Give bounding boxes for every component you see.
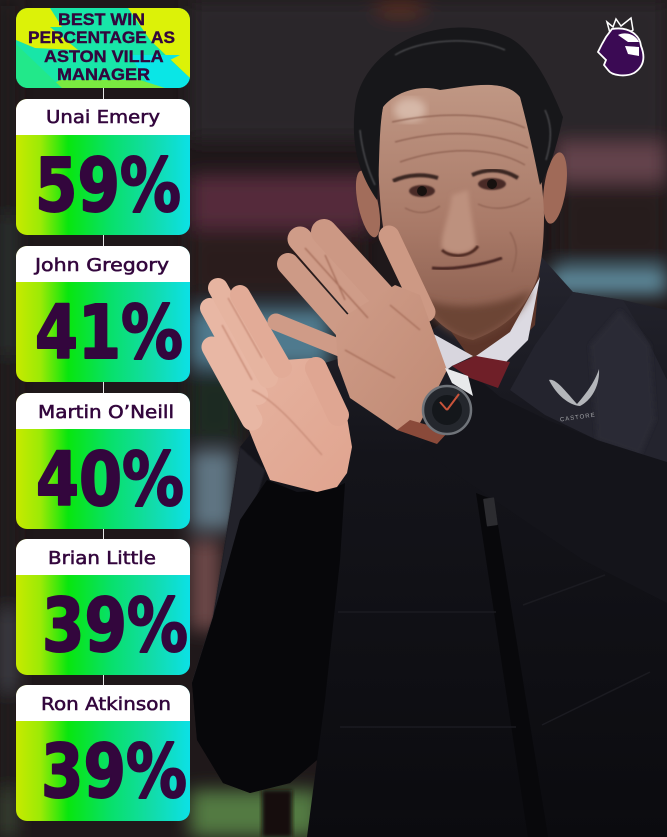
card: Brian Little 39% xyxy=(16,539,190,675)
jacket logo: CASTORE xyxy=(560,413,596,423)
photo: manager in dark jacket applauding xyxy=(192,27,667,837)
card: Unai Emery 59%: Unai Emery xyxy=(46,107,160,128)
tie xyxy=(452,356,510,388)
card: Unai Emery 59%: 59% xyxy=(35,143,181,229)
pupils xyxy=(417,179,497,196)
face xyxy=(378,85,544,340)
zipper xyxy=(476,493,548,837)
jacket body xyxy=(192,253,667,837)
nose underside xyxy=(442,246,478,256)
card: Ron Atkinson 39% xyxy=(16,685,190,821)
back hand palm xyxy=(210,288,352,492)
hair highlights xyxy=(360,41,550,185)
card: John Gregory 41%: John Gregory xyxy=(34,255,169,276)
mouth xyxy=(432,258,502,269)
nose xyxy=(442,190,476,254)
card: Unai Emery 59% xyxy=(16,99,190,235)
connector lines xyxy=(103,88,104,686)
card: Ron Atkinson 39%: 39% xyxy=(41,729,187,815)
quilting seams xyxy=(338,575,650,727)
right eye xyxy=(478,178,506,190)
hair xyxy=(354,27,563,200)
card: Martin O'Neill 40%: Martin O’Neill xyxy=(38,402,174,423)
card: Brian Little 39%: Brian Little xyxy=(48,548,156,569)
jacket logo xyxy=(549,369,599,423)
title panel: ASTON VILLA xyxy=(44,47,163,66)
card: Martin O'Neill 40% xyxy=(16,393,190,529)
forearm sleeve xyxy=(420,372,667,603)
shirt collar left xyxy=(430,332,473,372)
face wrinkles xyxy=(392,115,530,272)
upper chest panel xyxy=(510,292,667,470)
watch xyxy=(397,368,473,444)
eyebrows xyxy=(393,170,518,181)
icon: league lion logo xyxy=(598,18,643,75)
right ear xyxy=(539,151,571,225)
neck xyxy=(425,265,540,362)
card: John Gregory 41%: 41% xyxy=(35,290,183,376)
card: Brian Little 39%: 39% xyxy=(42,583,188,669)
title panel: PERCENTAGE AS xyxy=(28,28,175,47)
zip pull xyxy=(483,497,498,527)
near-black forearm and cuff xyxy=(192,480,345,793)
left eye xyxy=(409,185,435,197)
chin shadow xyxy=(420,290,532,340)
title panel: MANAGER xyxy=(57,65,150,84)
title panel: BEST WIN xyxy=(58,10,145,29)
card: John Gregory 41% xyxy=(16,246,190,382)
card: Ron Atkinson 39%: Ron Atkinson xyxy=(41,694,171,715)
title panel xyxy=(16,8,190,88)
left ear xyxy=(351,169,385,239)
card: Martin O'Neill 40%: 40% xyxy=(36,437,184,523)
outer sleeve highlight xyxy=(192,447,265,683)
front hand back xyxy=(276,232,447,430)
shirt collar right xyxy=(476,277,540,363)
forehead highlight xyxy=(394,98,426,122)
